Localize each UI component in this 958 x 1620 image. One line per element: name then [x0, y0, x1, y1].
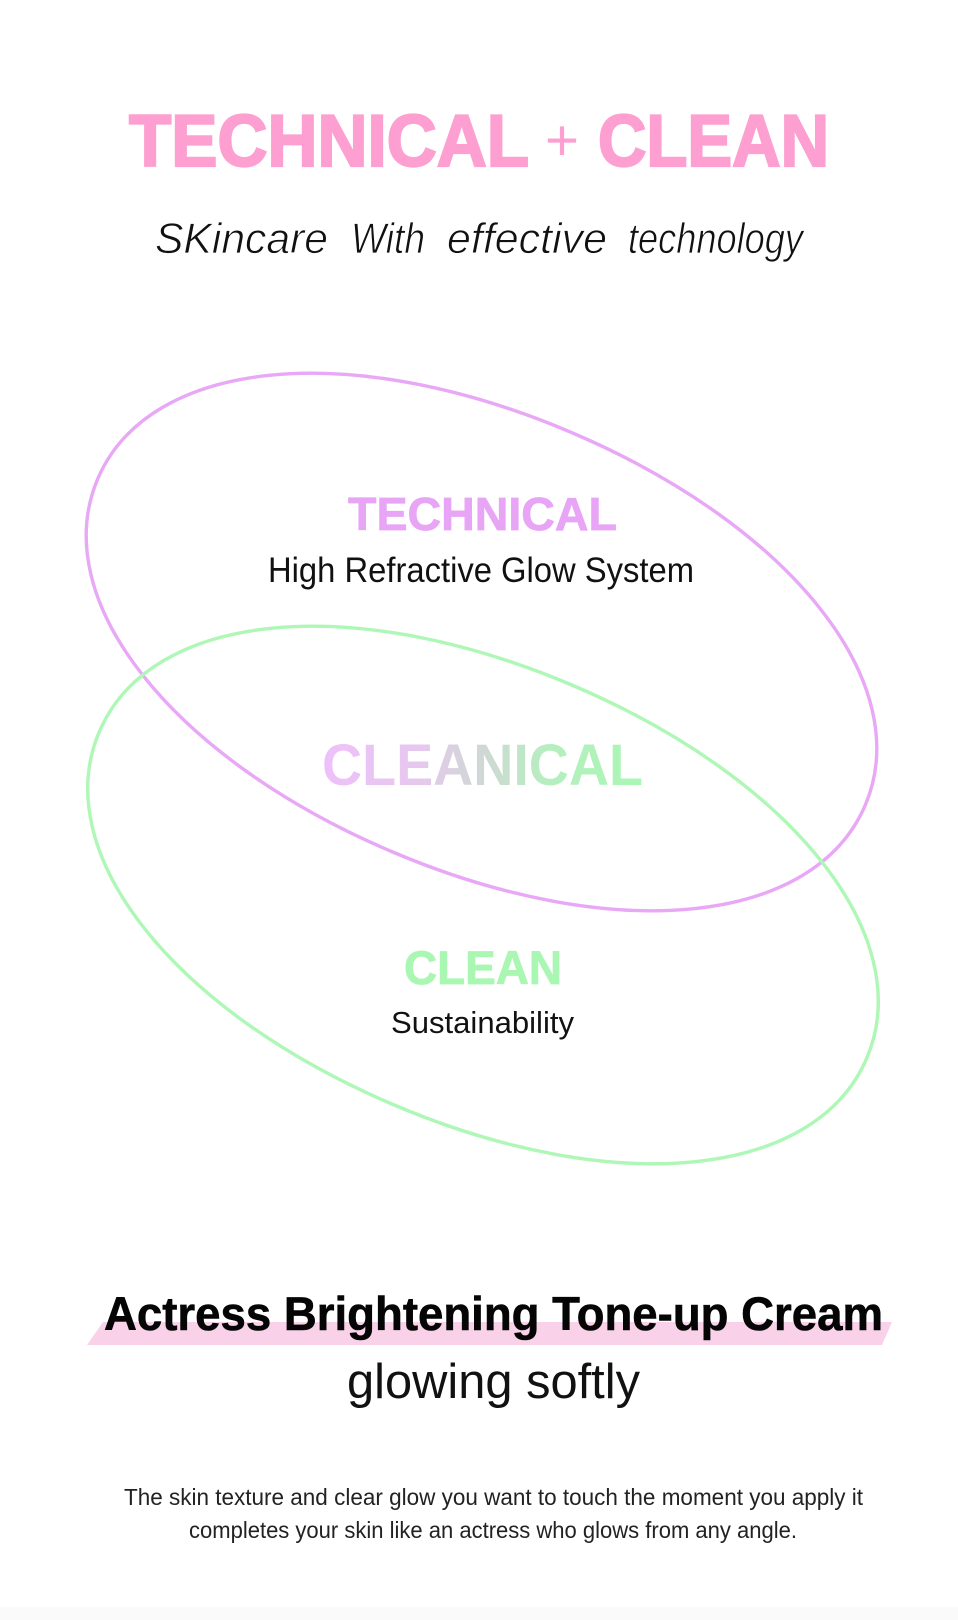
highlight stroke [87, 1322, 892, 1345]
label: sustainability: Sustainability [391, 1005, 574, 1040]
venn diagram [9, 269, 956, 1268]
title: TECHNICAL [129, 101, 529, 182]
label: high refractive glow system: High Refractive Glow System [268, 551, 694, 590]
handwritten subtitle: With [351, 215, 425, 263]
handwritten subtitle: effective [447, 215, 607, 263]
description [124, 1484, 864, 1543]
handwritten subtitle: SKincare [155, 215, 328, 263]
label: technical: TECHNICAL [348, 488, 617, 540]
ellipse: technical [9, 269, 954, 1015]
ellipse: clean [10, 522, 956, 1268]
label: clean: CLEAN [404, 941, 562, 994]
label: cleanical: CLEANICAL [322, 733, 643, 798]
title [129, 101, 829, 182]
product name: Actress Brightening Tone-up Cream [104, 1287, 883, 1340]
title: CLEAN [598, 101, 829, 182]
handwritten subtitle: technology [628, 215, 805, 263]
handwritten subtitle [155, 215, 805, 263]
title: + [545, 108, 579, 173]
description: completes your skin like an actress who glows from any angle. [189, 1517, 797, 1543]
description: The skin texture and clear glow you want to touch the moment you apply it [124, 1484, 864, 1510]
tagline: glowing softly [347, 1355, 640, 1409]
